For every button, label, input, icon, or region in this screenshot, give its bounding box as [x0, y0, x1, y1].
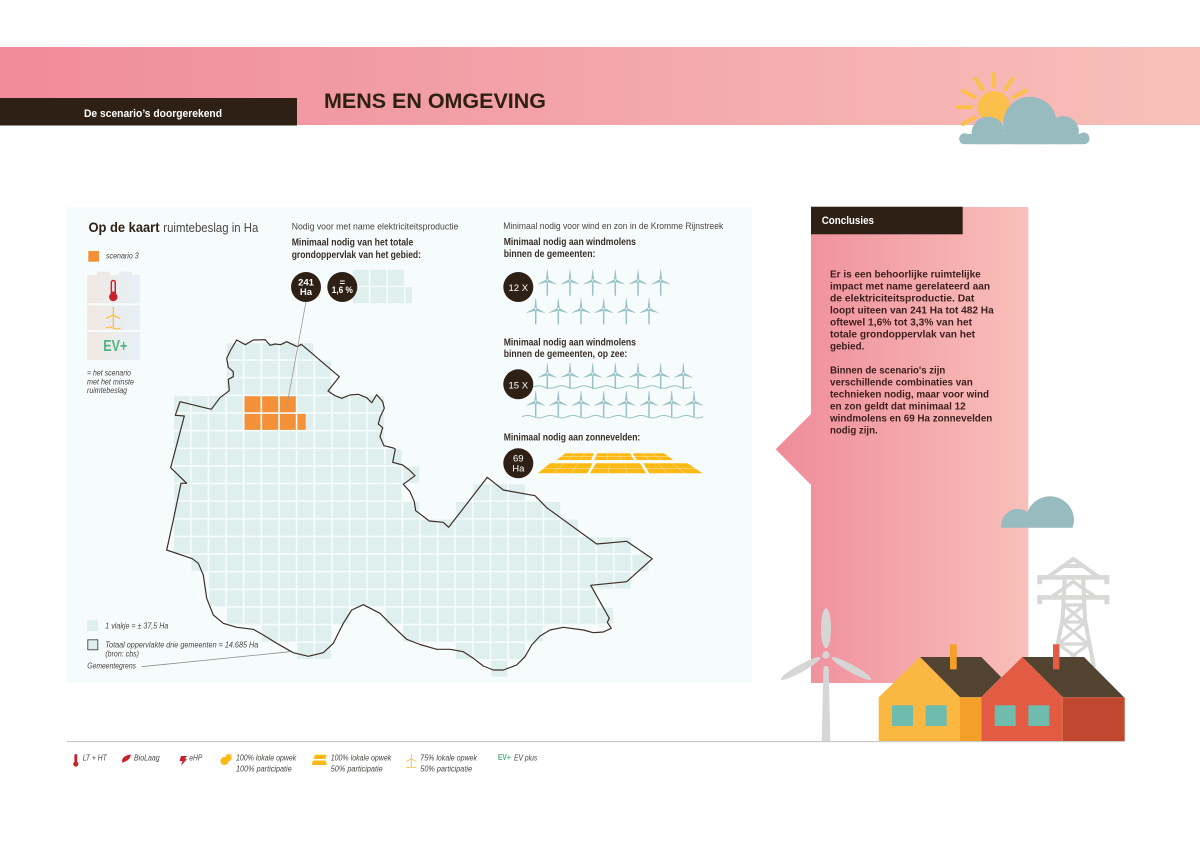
icon: cloud	[1001, 496, 1074, 528]
icon: thermometer	[109, 280, 118, 301]
text block: wind turbines at sea: binnen de gemeenten, op zee:	[504, 349, 627, 360]
icon: houses	[879, 644, 1125, 741]
icon: EV+: EV+	[103, 338, 127, 355]
panel: map	[67, 207, 752, 683]
conclusions paragraph 2: verschillende combinaties van	[830, 377, 973, 388]
badge: 241 Ha: Ha	[300, 287, 313, 298]
legend: solar generation: 100% lokale opwek	[331, 753, 392, 763]
badge: 241 Ha	[291, 272, 321, 302]
legend: eHP: eHP	[189, 753, 203, 763]
legend: solar generation	[312, 753, 392, 774]
icons: 15 wind turbines on water	[522, 363, 703, 418]
legend: LT + HT: LT + HT	[83, 753, 107, 763]
legend: solar generation: 50% participatie	[331, 764, 383, 774]
conclusions heading: Conclusies	[822, 215, 874, 227]
text block: electricity production: grondoppervlak van het gebied:	[292, 250, 421, 261]
note: lowest footprint scenario: = het scenario	[87, 368, 131, 378]
conclusions paragraph 2	[829, 365, 992, 437]
conclusions paragraph 1: de elektriciteitsproductie. Dat	[830, 294, 975, 305]
legend: wind generation: 75% lokale opwek	[420, 753, 478, 763]
icon: sun and cloud	[955, 74, 1095, 162]
ground line	[67, 741, 1125, 743]
icons: 12 wind turbines	[527, 270, 670, 324]
legend: one cell: 1 vlakje = ± 37,5 Ha	[105, 620, 168, 630]
badge: 1,6 percent: 1,6 %	[332, 285, 353, 296]
conclusions paragraph 2: Binnen de scenario's zijn	[830, 365, 945, 376]
conclusions paragraph 1: impact met name gerelateerd aan	[830, 281, 990, 292]
badge: 69 Ha	[503, 448, 533, 478]
text block: wind turbines on land: binnen de gemeenten:	[504, 249, 595, 260]
legend: EV plus: EV plus	[514, 753, 538, 763]
map: grid cells	[174, 351, 648, 669]
note: lowest footprint scenario	[87, 368, 134, 395]
legend: BioLaag	[122, 753, 160, 763]
title: MENS EN OMGEVING	[324, 89, 546, 113]
badge: 241 Ha: 241	[298, 278, 315, 288]
legend: LT + HT	[73, 753, 107, 767]
badge: 15 X	[503, 369, 533, 399]
legend: full local generation: 100% participatie	[236, 764, 292, 774]
badge: 1,6 percent: =	[340, 278, 346, 288]
conclusions paragraph 1: Er is een behoorlijke ruimtelijke	[830, 269, 981, 280]
legend: total area	[88, 639, 258, 658]
legend bar	[73, 752, 538, 774]
header band	[0, 47, 1200, 126]
legend: eHP	[180, 753, 203, 766]
badge: 1,6 percent	[327, 272, 357, 302]
conclusions paragraph 2: windmolens en 69 Ha zonnevelden	[829, 414, 992, 425]
icon: grey wind turbine	[779, 608, 873, 741]
badge: 12 X: 12 X	[509, 283, 529, 294]
badge: 12 X	[503, 272, 533, 302]
text block: wind turbines on land	[504, 237, 636, 260]
section label bar: De scenario’s doorgerekend	[84, 108, 222, 120]
heading: op de kaart: ruimtebeslag in Ha	[163, 220, 259, 235]
text block: electricity production: Minimaal nodig van het totale	[292, 237, 414, 248]
badge: 15 X: 15 X	[509, 380, 529, 391]
badge: 69 Ha: 69	[513, 454, 524, 464]
conclusions paragraph 2: en zon geldt dat minimaal 12	[830, 402, 966, 413]
legend: total area: Totaal oppervlakte drie gemeenten = 14.685 Ha	[105, 639, 258, 649]
legend: municipal boundary label: Gemeentegrens	[87, 660, 137, 670]
map: orange scenario cells	[245, 404, 306, 422]
legend: EV plus: EV+	[498, 752, 511, 762]
conclusions paragraph 2: technieken nodig, maar voor wind	[830, 390, 989, 401]
badge: 69 Ha: Ha	[512, 464, 525, 474]
map: municipality boundary	[167, 340, 652, 670]
note: lowest footprint scenario: met het minste	[87, 376, 134, 386]
legend: full local generation	[220, 753, 297, 774]
legend: full local generation: 100% lokale opwek	[236, 753, 297, 763]
conclusions heading	[811, 207, 963, 234]
text block: wind turbines at sea	[504, 337, 636, 360]
conclusions paragraph 1: loopt uiteen van 241 Ha tot 482 Ha	[830, 306, 994, 317]
conclusions paragraph 1: oftewel 1,6% tot 3,3% van het	[830, 318, 973, 329]
legend: wind generation: 50% participatie	[420, 764, 472, 774]
legend: municipal boundary label	[87, 652, 290, 670]
icon: wind turbine on water	[106, 307, 121, 329]
legend: EV plus	[498, 752, 538, 763]
section label bar	[0, 98, 297, 126]
legend: total area: (bron: cbs)	[105, 648, 139, 658]
conclusions paragraph 1: gebied.	[830, 342, 864, 353]
legend: BioLaag: BioLaag	[134, 753, 160, 763]
text block: electricity production	[292, 221, 458, 261]
icon: electricity pylon	[1037, 559, 1109, 667]
yellow house	[879, 644, 1001, 741]
panel: conclusions	[776, 207, 1028, 683]
text block: solar fields: Minimaal nodig aan zonnevelden:	[504, 433, 640, 444]
text block: electricity production: Nodig voor met name elektriciteitsproductie	[292, 221, 458, 232]
heading: op de kaart: Op de kaart	[88, 220, 160, 235]
small grid: 1,6 percent	[353, 278, 412, 295]
heading: op de kaart	[88, 220, 259, 235]
icons: solar panels	[538, 453, 703, 473]
legend: one cell	[87, 620, 168, 631]
legend: scenario 3: scenario 3	[106, 251, 139, 261]
text block: wind and sun heading: Minimaal nodig voor wind en zon in de Kromme Rijnstreek	[503, 221, 724, 232]
conclusions paragraph 2: nodig zijn.	[830, 426, 878, 437]
leader line: 241 Ha to map	[287, 302, 306, 407]
conclusions paragraph 1: totale grondoppervlak van het	[830, 330, 976, 341]
text block: wind turbines at sea: Minimaal nodig aan windmolens	[504, 337, 636, 348]
conclusions paragraph 1	[830, 269, 994, 353]
red house	[981, 644, 1125, 741]
note: lowest footprint scenario: ruimtebeslag	[87, 385, 127, 395]
text block: wind turbines on land: Minimaal nodig aan windmolens	[504, 237, 636, 248]
scenario blocks	[87, 272, 140, 360]
legend: wind generation	[406, 753, 478, 774]
legend: scenario 3	[88, 251, 139, 262]
